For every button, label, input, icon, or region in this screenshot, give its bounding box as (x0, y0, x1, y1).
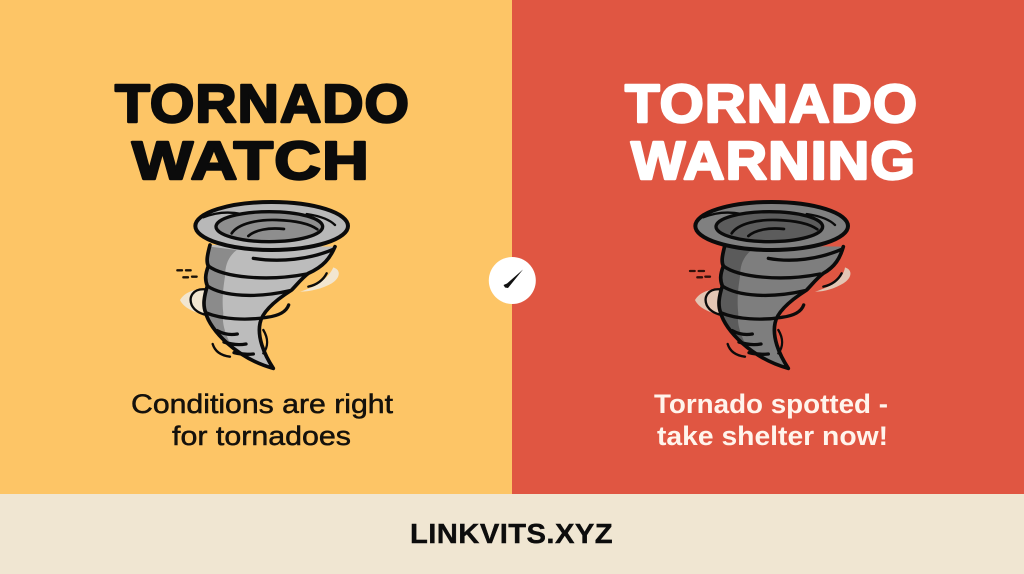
icon: center check badge (489, 257, 536, 304)
icon: dark tornado (690, 202, 850, 368)
panel: tornado warning (512, 0, 1024, 494)
text: watch description: for tornadoes (172, 421, 351, 451)
heading: tornado watch: WATCH (132, 131, 370, 191)
heading: tornado watch: TORNADO (115, 74, 410, 134)
panel: tornado watch (0, 0, 512, 494)
footer band (0, 494, 1024, 574)
text: watch description (131, 389, 394, 451)
text: warning description: take shelter now! (657, 421, 888, 451)
text: watch description: Conditions are right (131, 389, 394, 419)
text: warning description (654, 389, 888, 451)
icon: grey tornado (177, 202, 348, 368)
heading: tornado warning: WARNING (631, 131, 916, 191)
heading: tornado warning (625, 74, 918, 191)
heading: tornado warning: TORNADO (625, 74, 918, 134)
heading: tornado watch (115, 74, 410, 191)
text: warning description: Tornado spotted - (654, 389, 888, 419)
text: footer brand: LINKVITS.XYZ (410, 518, 613, 549)
